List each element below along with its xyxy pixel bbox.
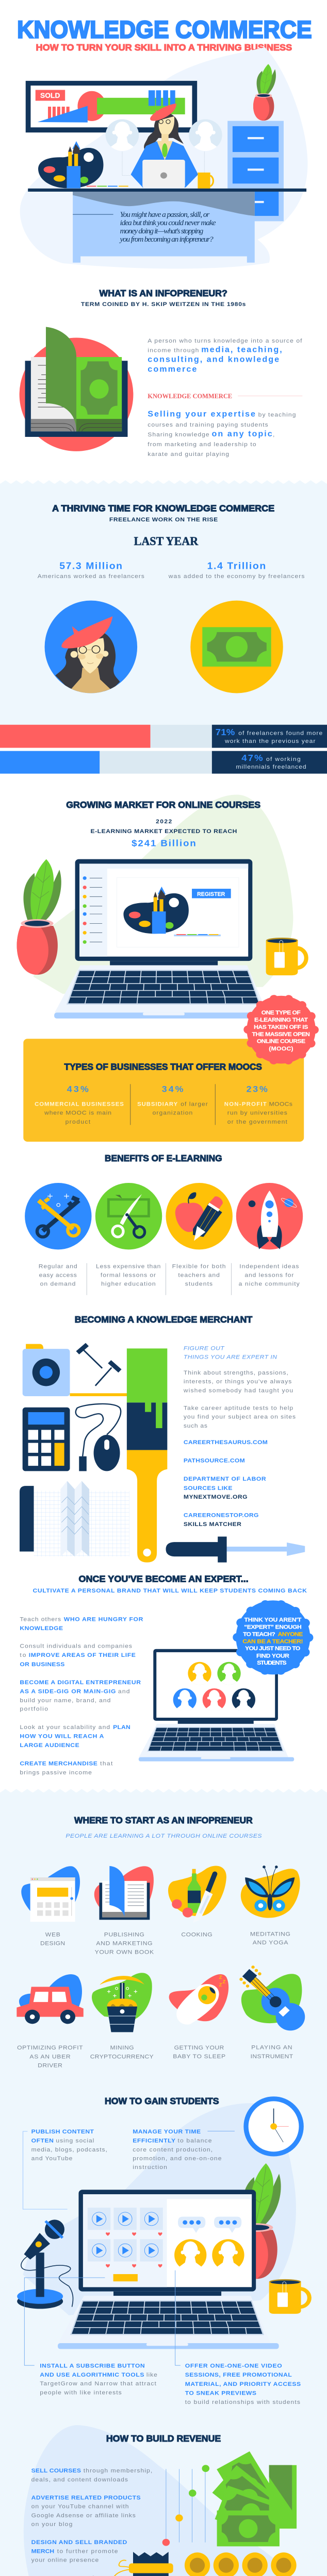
bar: 47 percent: 47% [241, 753, 263, 763]
icon: open notebook [20, 1481, 129, 1556]
heading: GROWING MARKET FOR ONLINE COURSES [66, 800, 260, 810]
callout badge: mooc: ONLINE COURSE [257, 1038, 305, 1045]
bar: 71 percent: 71% [216, 727, 235, 737]
filing cabinet [227, 121, 284, 221]
callout badge: anyone can be a teacher: ANYONE [278, 1631, 303, 1638]
callout badge: anyone can be a teacher: STUDENTS [257, 1659, 287, 1666]
text: revenue ideas: deals, and content downloads [31, 2476, 128, 2483]
intro text: money doing it—what's stopping [120, 227, 204, 235]
icon: scissors cutting money [95, 1183, 162, 1249]
text: benefit captions: Less expensive than [96, 1263, 160, 1269]
intro text: You might have a passion, skill, or [120, 211, 210, 219]
icon: rocket [236, 1183, 303, 1249]
text: knowledge commerce: KNOWLEDGE COMMERCE [148, 393, 232, 400]
icon: fan of bills [212, 2451, 297, 2546]
column: subsidiary: SUBSIDIARY [137, 1101, 178, 1107]
text: one-on-one sessions: OFFER ONE-ONE-ONE VIDEO [185, 2362, 282, 2369]
item: meditating butterfly: MEDITATING [250, 1930, 290, 1937]
icon: paint palette [38, 141, 103, 188]
text: revenue ideas: on your blog [31, 2520, 72, 2528]
intro text: idea but think you could never make [120, 219, 216, 227]
text: career sites: CAREERONESTOP.ORG [184, 1512, 258, 1518]
text: benefit captions: Regular and [39, 1263, 77, 1269]
icon: coins [185, 2552, 297, 2576]
item: meditating butterfly [241, 1866, 300, 1946]
text: benefit captions: teachers and [178, 1272, 220, 1278]
intro text [119, 211, 216, 244]
text: knowledge commerce [148, 393, 302, 457]
icon: coffee mug [198, 173, 213, 189]
subheading: PEOPLE ARE LEARNING A LOT THROUGH ONLINE COURSES [66, 1832, 262, 1839]
text: subscribe button: like [146, 2371, 157, 2378]
panel: where to start as an infopreneur [17, 1815, 305, 2069]
callout badge: mooc: ONE TYPE OF [261, 1009, 301, 1016]
text: definition: A person who turns knowledge into a source of [148, 337, 302, 344]
panel: benefits of e-learning [25, 1153, 303, 1295]
bar: 71 percent: work than the previous year [224, 737, 316, 744]
text: figure out: such as [184, 1422, 207, 1429]
laptop with students [139, 1649, 294, 1761]
text: figure out: THINGS YOU ARE EXPERT IN [184, 1353, 277, 1361]
callout badge: anyone can be a teacher: “EXPERT” ENOUGH [244, 1623, 302, 1630]
text: knowledge commerce: Sharing knowledge [148, 431, 209, 438]
column: commercial businesses: 43% [67, 1084, 89, 1094]
column: commercial businesses: product [66, 1118, 91, 1125]
callout badge: anyone can be a teacher [236, 1600, 310, 1674]
item: playing an instrument [239, 1965, 305, 2060]
text: figure out: you find your subject area on sites [184, 1413, 296, 1420]
text: manage your time: instruction [133, 2163, 167, 2171]
icon: plant [236, 2163, 281, 2279]
text: publish content: and YouTube [31, 2155, 73, 2162]
bar: 47 percent [0, 751, 327, 774]
column: subsidiary: organization [153, 1109, 192, 1116]
callout badge: anyone can be a teacher: FIND YOUR [256, 1652, 289, 1659]
text: figure out: Take career aptitude tests to help [184, 1404, 293, 1411]
callout badge: mooc: (MOOC) [269, 1045, 293, 1052]
icon: keys [25, 1183, 92, 1249]
callout badge: mooc: HAS TAKEN OFF IS [254, 1023, 308, 1030]
text: subscribe button [40, 2362, 157, 2396]
chart lines with dots [162, 2465, 209, 2546]
icon: potted plant [253, 64, 276, 121]
column: non-profit: run by universities [227, 1109, 287, 1116]
icon: plant [17, 859, 61, 975]
item: meditating butterfly: AND YOGA [253, 1939, 288, 1946]
character: woman at laptop [131, 104, 198, 188]
item: cooking [168, 1866, 226, 1938]
text: revenue ideas: on your YouTube channel with [31, 2503, 129, 2510]
callout badge: anyone can be a teacher: YOU JUST NEED TO [245, 1645, 300, 1652]
text: definition: media, teaching, [201, 346, 282, 354]
column: commercial businesses: COMMERCIAL BUSINESSES [35, 1101, 124, 1107]
text: figure out [183, 1345, 296, 1429]
text: ways to use expertise: that [100, 1760, 113, 1767]
item: baby sleeping [169, 1974, 228, 2060]
column: non-profit: MOOCs [269, 1100, 292, 1107]
heading: TYPES OF BUSINESSES THAT OFFER MOOCS [64, 1062, 262, 1072]
text: manage your time: EFFICIENTLY [133, 2137, 175, 2144]
text: knowledge commerce: by teaching [258, 411, 296, 418]
stat: 57.3 million [38, 561, 144, 580]
background blob [24, 2425, 304, 2576]
text: ways to use expertise: and [118, 1688, 130, 1695]
text: ways to use expertise: KNOWLEDGE [20, 1624, 63, 1632]
text: benefit captions: and lessons for [244, 1272, 293, 1278]
icon: student avatars [106, 120, 222, 176]
icon: mug [269, 2279, 309, 2314]
bar: 47 percent: millennials freelanced [236, 763, 306, 770]
text: publish content: media, blogs, podcasts, [31, 2146, 107, 2153]
heading: A THRIVING TIME FOR KNOWLEDGE COMMERCE [52, 503, 274, 514]
item: publishing book: AND MARKETING [96, 1940, 153, 1947]
text: one-on-one sessions [185, 2362, 301, 2405]
text: career sites: MYNEXTMOVE.ORG [184, 1493, 248, 1500]
callout badge: mooc: E-LEARNING THAT [254, 1016, 308, 1023]
panel: how to gain students [17, 2096, 309, 2405]
text: publish content: OFTEN [31, 2137, 54, 2144]
text: ways to use expertise: AS A SIDE-GIG OR MAIN-GIG [20, 1688, 116, 1695]
text: revenue ideas: DESIGN AND SELL BRANDED [31, 2538, 127, 2546]
text: ways to use expertise: Look at your scalability and [20, 1723, 110, 1731]
icon: calculator [23, 1408, 70, 1471]
icon: mug [266, 938, 306, 975]
text: ways to use expertise [20, 1616, 143, 1776]
text: one-on-one sessions: TO SNEAK PREVIEWS [185, 2389, 256, 2397]
item: publishing book: PUBLISHING [104, 1931, 144, 1938]
subheading: TERM COINED BY H. SKIP WEITZEN IN THE 1980s [81, 300, 246, 308]
item: mining cryptocurrency: CRYPTOCURRENCY [90, 2053, 154, 2060]
text: career sites: PATHSOURCE.COM [184, 1457, 245, 1464]
bar: 47 percent: of working [266, 755, 301, 762]
callout badge: mooc: THE MASSIVE OPEN [252, 1030, 310, 1038]
icon: clock [243, 2096, 304, 2157]
icon: computer mouse [76, 1404, 121, 1471]
item: uber driver car: OPTIMIZING PROFIT [17, 2044, 83, 2051]
heading: WHAT IS AN INFOPRENEUR? [99, 289, 227, 298]
item: baby sleeping: GETTING YOUR [174, 2044, 224, 2051]
stat: e-learning market: E-LEARNING MARKET EXPECTED TO REACH [91, 827, 237, 835]
text: ways to use expertise: PLAN [113, 1723, 130, 1731]
text: career sites [184, 1438, 268, 1528]
text: ways to use expertise: brings passive income [20, 1769, 92, 1776]
text: knowledge commerce: Selling your expertise [148, 410, 255, 418]
icon: pencil marker [166, 1536, 305, 1563]
text: benefit captions: students [185, 1280, 212, 1287]
background blob [23, 2103, 296, 2315]
text: ways to use expertise: LARGE AUDIENCE [20, 1741, 79, 1749]
text: knowledge commerce: courses and training paying students [148, 421, 268, 428]
text: ways to use expertise: HOW YOU WILL REACH A [20, 1733, 104, 1739]
text: ways to use expertise: build your name, brand, and [20, 1697, 110, 1704]
panel: thriving time for knowledge commerce [0, 503, 327, 774]
text: ways to use expertise: portfolio [20, 1705, 48, 1713]
item: uber driver car: AS AN UBER [29, 2053, 71, 2060]
icon: hammers [77, 1345, 120, 1386]
item: playing an instrument: PLAYING AN [251, 2044, 292, 2051]
text: figure out: Think about strengths, passions, [184, 1369, 288, 1376]
column: non-profit: 23% [247, 1084, 268, 1094]
column: subsidiary: of larger [181, 1100, 208, 1107]
callout badge: anyone can be a teacher: CAN BE A TEACHER! [242, 1638, 303, 1645]
stat: 57.3 million: Americans worked as freelancers [38, 572, 144, 580]
callout badge: anyone can be a teacher: TO TEACH? [243, 1631, 275, 1638]
item: mining cryptocurrency [90, 1973, 154, 2060]
text: subscribe button: TargetGrow and Narrow that attract [40, 2380, 157, 2387]
item: uber driver car [17, 1974, 84, 2069]
text: knowledge commerce: karate and guitar playing [148, 450, 229, 457]
column: subsidiary: 34% [162, 1084, 183, 1094]
text: figure out: interests, or things you've always [184, 1378, 291, 1385]
text: benefit captions: Flexible for both [172, 1263, 226, 1269]
text: benefit captions: Independent ideas [239, 1263, 299, 1269]
icon: money [190, 601, 283, 693]
text: ways to use expertise: Teach others [20, 1616, 61, 1622]
item: baby sleeping: Z [219, 1975, 222, 1980]
column: subsidiary [137, 1084, 208, 1116]
column: commercial businesses [35, 1084, 124, 1125]
heading: BENEFITS OF E-LEARNING [105, 1153, 222, 1163]
wall picture: SOLD [40, 92, 60, 100]
icon: paint brush [127, 1348, 167, 1563]
text: revenue ideas: through membership, [84, 2467, 152, 2474]
text: ways to use expertise: CREATE MERCHANDISE [20, 1760, 97, 1767]
text: career sites: SKILLS MATCHER [184, 1520, 241, 1528]
text: manage your time: to balance [178, 2137, 212, 2144]
stat: 1.4 trillion: 1.4 Trillion [207, 561, 266, 571]
text: publish content: using social [56, 2137, 94, 2144]
last year label: LAST YEAR [134, 535, 199, 548]
green background blob [34, 794, 293, 994]
text: benefit captions: a niche community [239, 1280, 300, 1287]
laptop with course page: REGISTER [197, 890, 225, 897]
panel: how to build revenue [24, 2425, 304, 2576]
text: definition [148, 337, 302, 374]
text: knowledge commerce: from marketing and leadership to [148, 440, 256, 448]
bar: 71 percent [0, 725, 327, 748]
text: knowledge commerce: on any topic [211, 430, 272, 438]
text: manage your time: MANAGE YOUR TIME [133, 2128, 201, 2135]
text: knowledge commerce: , [273, 431, 274, 438]
heading: WHERE TO START AS AN INFOPRENEUR [74, 1815, 253, 1825]
text: ways to use expertise: OR BUSINESS [20, 1660, 64, 1668]
text: ways to use expertise: to [20, 1652, 26, 1658]
icon: apple and pencil [166, 1183, 233, 1249]
icon: microphone [17, 2219, 73, 2309]
item: publishing book [94, 1866, 154, 1955]
text: benefit captions [39, 1263, 300, 1295]
text: ways to use expertise: Consult individuals and companies [20, 1642, 132, 1650]
text: revenue ideas: to further promote [57, 2548, 118, 2554]
icon: tape measure [23, 1344, 155, 1396]
callout badge: anyone can be a teacher: THINK YOU AREN'T [244, 1616, 302, 1623]
stat: 57.3 million: 57.3 Million [59, 561, 122, 571]
laptop with videos and chat [58, 2190, 279, 2349]
callout badge: mooc [247, 996, 316, 1063]
text: career sites: SOURCES LIKE [184, 1484, 233, 1492]
stat: e-learning market: 2022 [156, 818, 172, 825]
stat: 1.4 trillion: was added to the economy by freelancers [168, 572, 305, 580]
heading: HOW TO GAIN STUDENTS [105, 2096, 219, 2106]
text: ways to use expertise: WHO ARE HUNGRY FOR [64, 1616, 143, 1622]
heading: ONCE YOU'VE BECOME AN EXPERT... [78, 1574, 249, 1584]
item: uber driver car: DRIVER [38, 2062, 62, 2069]
panel: hero [17, 16, 312, 269]
text: figure out: wished somebody had taught you [183, 1387, 293, 1394]
stat: 1.4 trillion [168, 561, 305, 580]
text: revenue ideas: MERCH [31, 2548, 54, 2554]
text: manage your time: core content production, [133, 2146, 212, 2153]
stat: e-learning market: $241 Billion [132, 838, 196, 848]
background: pale band thriving [0, 480, 327, 725]
text: one-on-one sessions: SESSIONS, FREE PROMOTIONAL [185, 2371, 292, 2378]
item: mining cryptocurrency: MINING [110, 2044, 134, 2051]
panel: once you've become an expert [20, 1574, 310, 1776]
panel: becoming a knowledge merchant [20, 1315, 305, 1563]
text: benefit captions: higher education [101, 1280, 156, 1287]
text: ways to use expertise: IMPROVE AREAS OF THEIR LIFE [29, 1652, 136, 1658]
subheading: CULTIVATE A PERSONAL BRAND THAT WILL WILL KEEP STUDENTS COMING BACK [32, 1587, 307, 1594]
column: non-profit: NON-PROFIT [224, 1101, 267, 1107]
text: definition: consulting, and knowledge [148, 355, 279, 364]
text: subscribe button: AND USE ALGORITHMIC TOOLS [40, 2371, 144, 2378]
text: revenue ideas: your online presence [31, 2556, 99, 2564]
text: publish content [23, 2128, 107, 2209]
text: one-on-one sessions: to build relationships with students [185, 2398, 300, 2405]
text: figure out: FIGURE OUT [184, 1345, 225, 1351]
text: benefit captions: formal lessons or [101, 1272, 156, 1278]
hero background blob [20, 47, 308, 269]
item: web design: DESIGN [40, 1940, 65, 1947]
desk [28, 186, 306, 263]
panel: growing market for online courses [17, 794, 306, 1019]
bar: 71 percent: of freelancers found more [238, 730, 323, 737]
text: definition: income through [148, 347, 199, 353]
text: ways to use expertise: BECOME A DIGITAL ENTREPRENEUR [20, 1679, 141, 1686]
heading: BECOMING A KNOWLEDGE MERCHANT [75, 1315, 252, 1325]
icon: money bag [105, 2552, 196, 2576]
text: subscribe button: people with like interests [40, 2389, 122, 2396]
text: subscribe button: INSTALL A SUBSCRIBE BUTTON [40, 2362, 145, 2369]
intro text: you from becoming an infopreneur? [119, 236, 214, 244]
laptop with course page [54, 859, 275, 1019]
item: baby sleeping: BABY TO SLEEP [173, 2053, 225, 2060]
wall picture [26, 81, 197, 132]
icon: woman portrait [45, 601, 137, 695]
text: career sites: DEPARTMENT OF LABOR [184, 1475, 266, 1482]
panel: types of businesses that offer moocs [23, 996, 316, 1142]
item: web design: WEB [45, 1931, 60, 1938]
item: baby sleeping: Z [219, 1982, 222, 1988]
text: revenue ideas: ADVERTISE RELATED PRODUCTS [31, 2494, 141, 2501]
text: career sites: CAREERTHESAURUS.COM [184, 1438, 268, 1446]
item: publishing book: YOUR OWN BOOK [95, 1948, 154, 1955]
stat: e-learning market [91, 818, 237, 848]
text: manage your time [133, 2128, 235, 2171]
text: publish content: PUBLISH CONTENT [31, 2128, 94, 2135]
text: revenue ideas: SELL COURSES [31, 2467, 81, 2474]
item: web design [21, 1866, 80, 1947]
text: benefit captions: easy access [39, 1272, 77, 1278]
item: baby sleeping: Z [222, 1979, 226, 1985]
text: one-on-one sessions: MATERIAL, AND PRIORITY ACCESS [185, 2380, 301, 2387]
text: revenue ideas: Google Adsense or affiliate links [31, 2512, 136, 2519]
heading: HOW TO BUILD REVENUE [106, 2433, 221, 2444]
text: benefit captions: on demand [40, 1280, 75, 1287]
icon: book of money [20, 327, 133, 451]
text: manage your time: promotion, and one-on-one [133, 2155, 222, 2162]
subheading: FREELANCE WORK ON THE RISE [109, 516, 218, 523]
text: revenue ideas [31, 2467, 152, 2576]
column: non-profit [224, 1084, 292, 1125]
column: commercial businesses: where MOOC is main [44, 1109, 111, 1116]
item: cooking: COOKING [181, 1931, 212, 1938]
panel: what is an infopreneur [20, 289, 302, 457]
column: non-profit: or the government [227, 1118, 288, 1125]
text: definition: commerce [148, 365, 197, 374]
background: pale band where to start through branding [0, 1789, 327, 2576]
item: playing an instrument: INSTRUMENT [251, 2053, 293, 2060]
subtitle: HOW TO TURN YOUR SKILL INTO A THRIVING BUSINESS [36, 42, 292, 53]
